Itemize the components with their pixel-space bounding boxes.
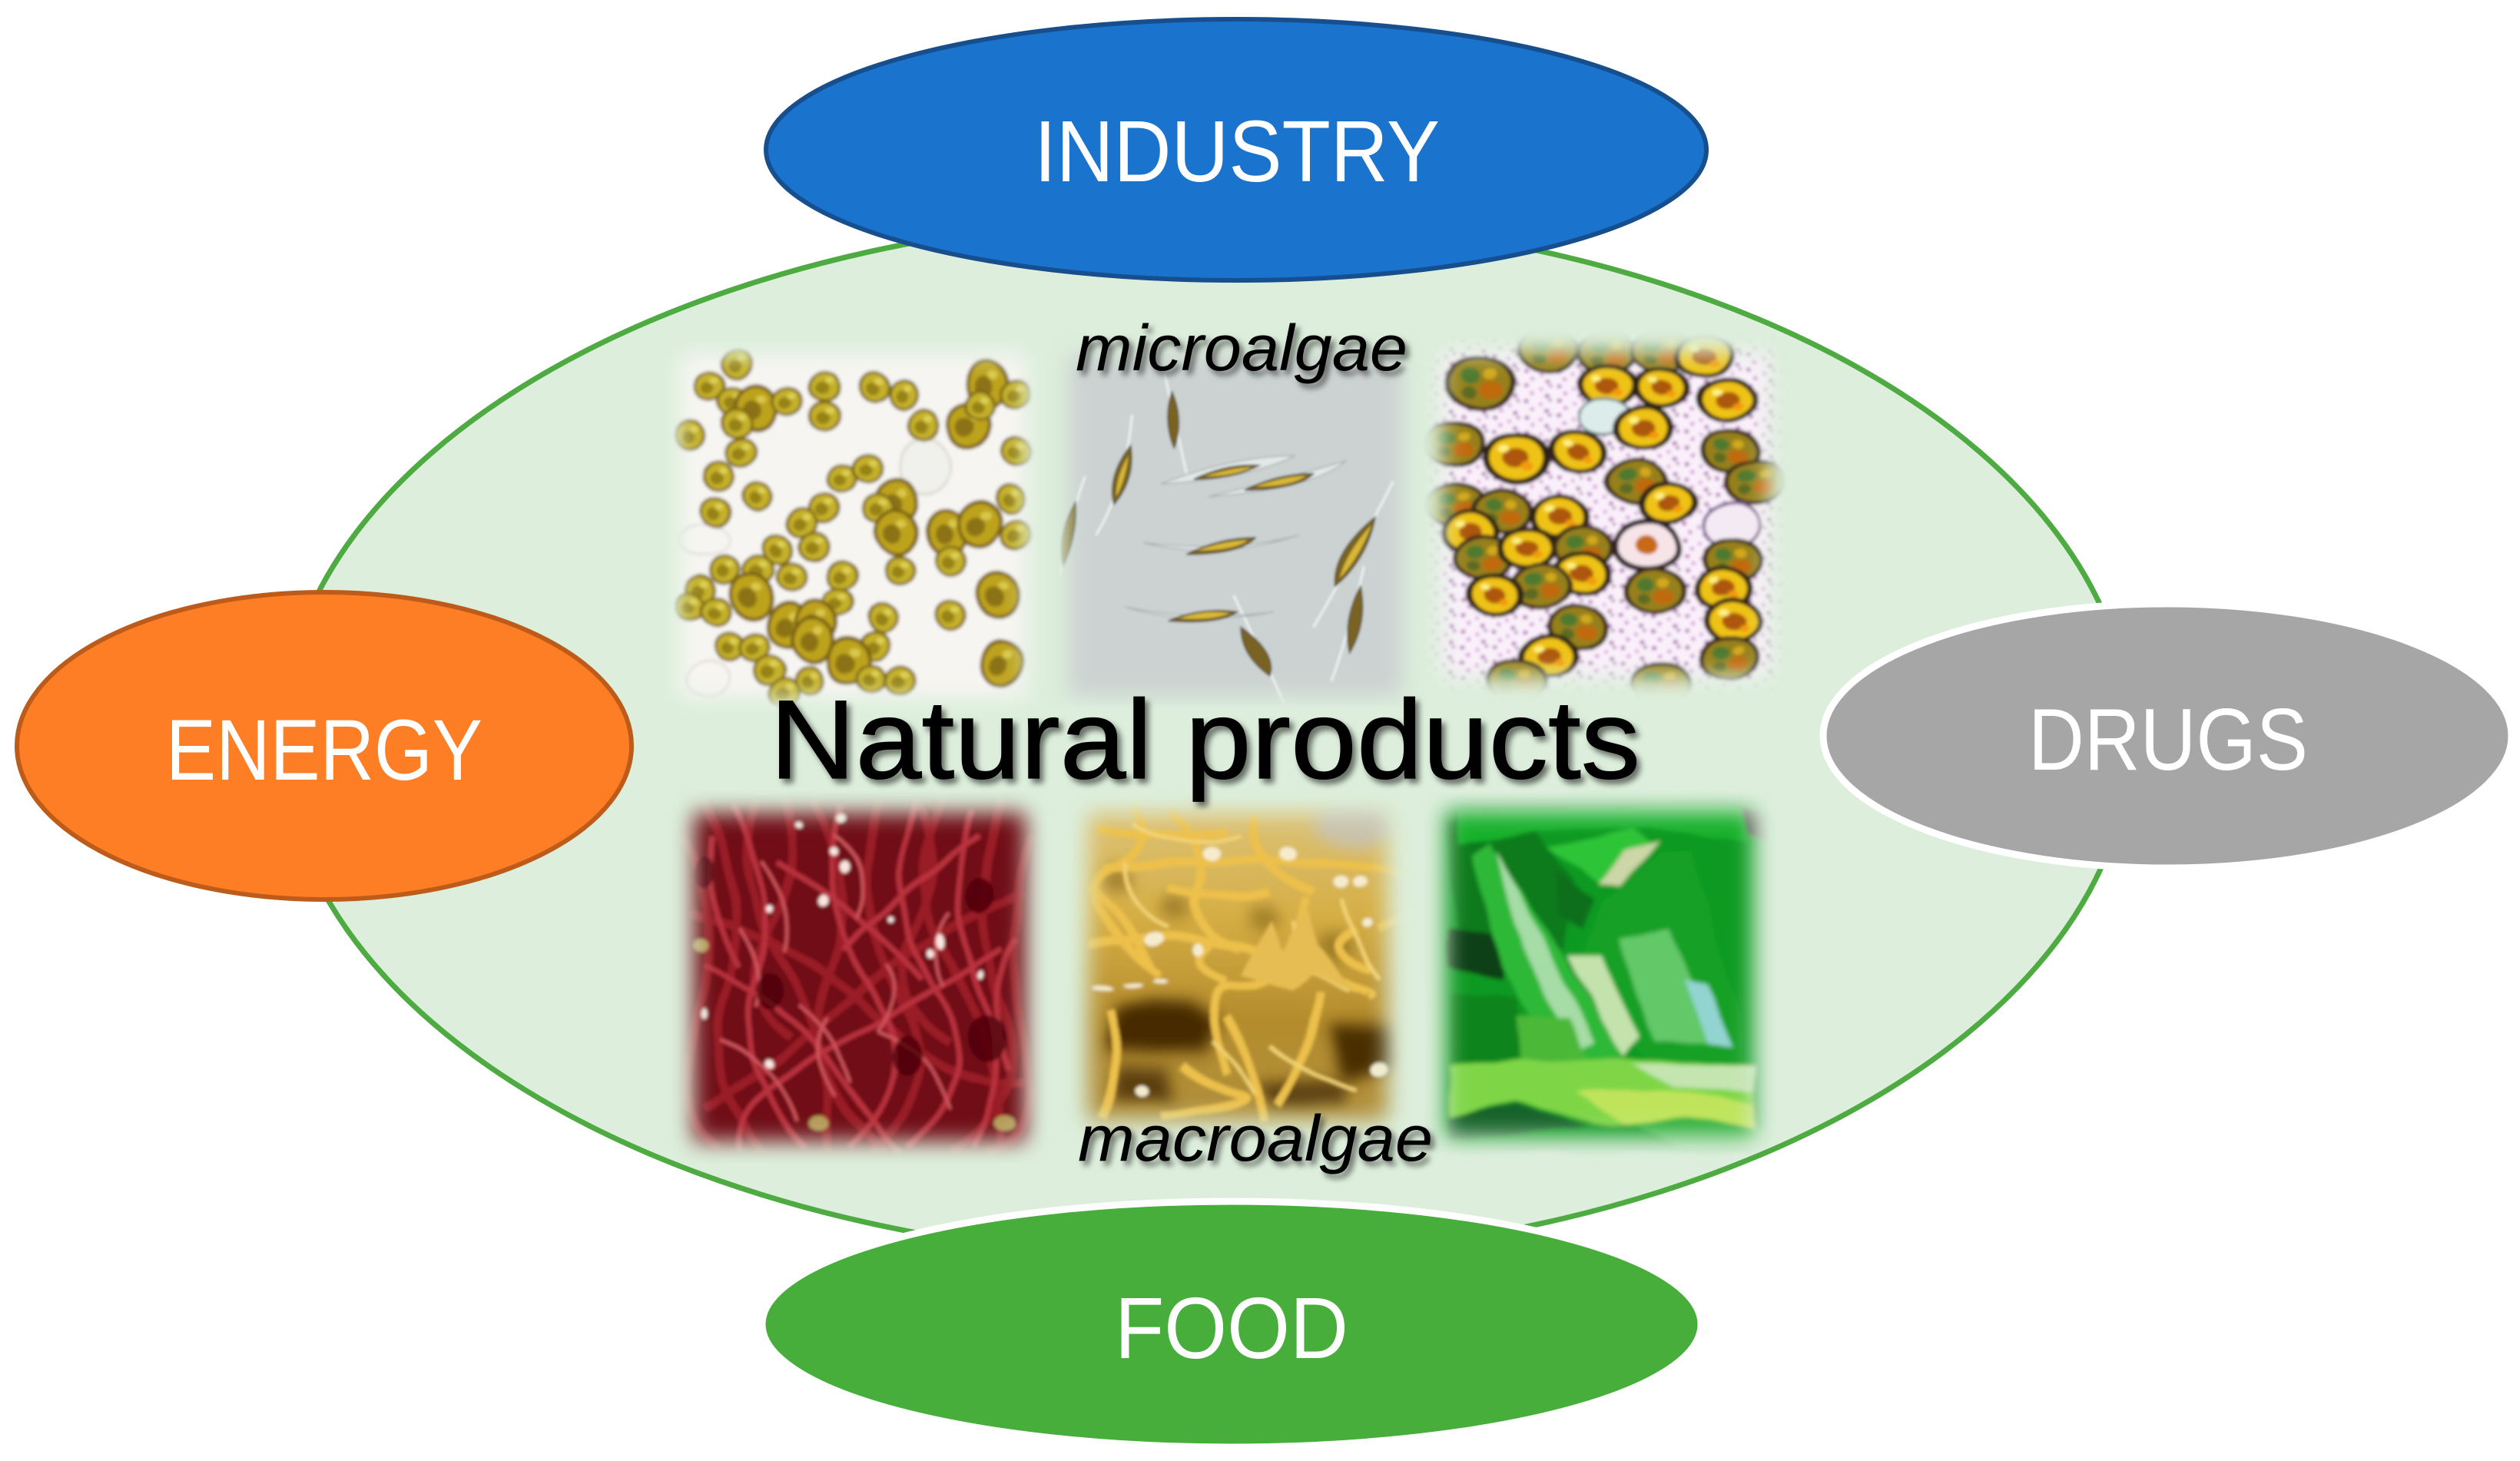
image: microalgae diatoms xyxy=(1059,349,1409,704)
oval: ENERGY: ENERGY xyxy=(166,702,482,798)
image: microalgae stained cells on pink background xyxy=(1426,336,1786,694)
image: macroalgae red seaweed xyxy=(661,791,1053,1165)
oval: FOOD xyxy=(762,1201,1701,1447)
label: microalgae: microalgae xyxy=(1076,312,1408,384)
label: macroalgae: macroalgae xyxy=(1078,1102,1433,1174)
oval: INDUSTRY xyxy=(766,19,1706,280)
oval: DRUGS: DRUGS xyxy=(2028,691,2308,789)
image: macroalgae golden seaweed xyxy=(1071,798,1404,1137)
oval: INDUSTRY: INDUSTRY xyxy=(1034,103,1440,200)
image: macroalgae green seaweed xyxy=(1422,791,1785,1155)
panel: natural products background ellipse xyxy=(282,216,2130,1259)
oval: DRUGS xyxy=(1823,604,2512,868)
oval: FOOD: FOOD xyxy=(1115,1280,1348,1377)
oval: ENERGY xyxy=(17,592,632,899)
image: microalgae yellow-green round cells xyxy=(673,348,1033,707)
heading: Natural products: Natural products xyxy=(770,677,1640,802)
